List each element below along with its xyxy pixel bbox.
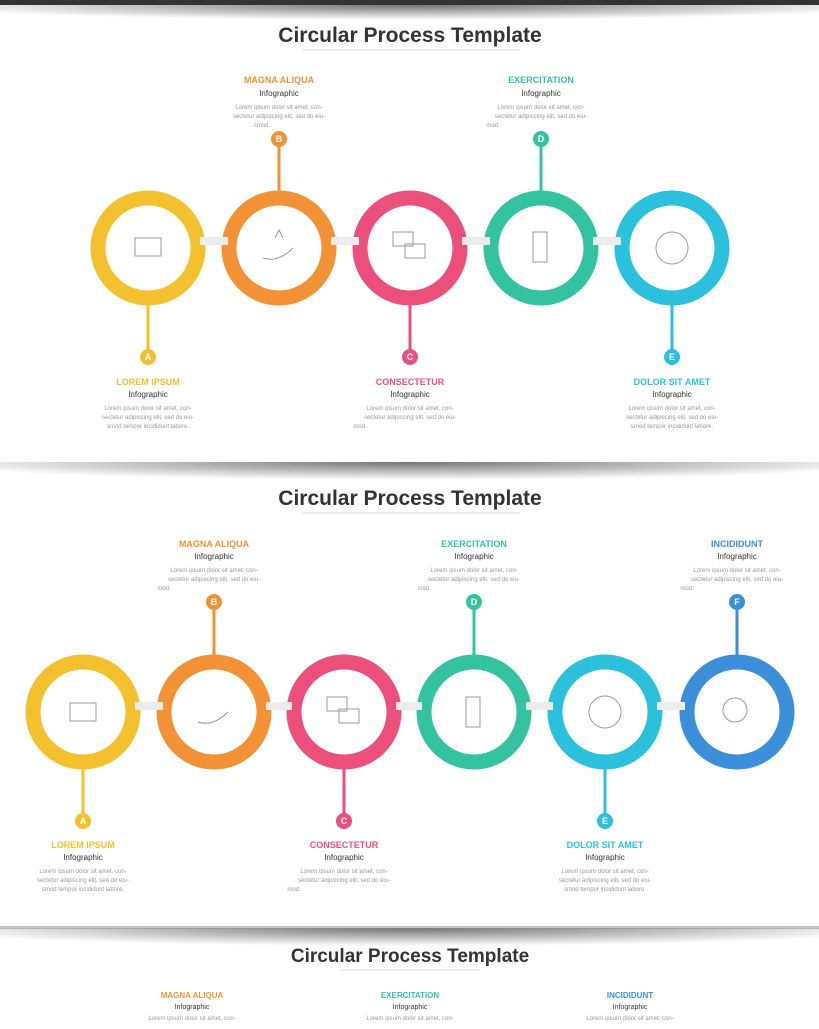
- text blocks 2: sectetur adipiscing elit, sed do eiu-: [559, 878, 651, 884]
- process chain 2: F: [734, 597, 740, 607]
- text blocks 1: EXERCITATION: [508, 75, 574, 85]
- text blocks 1: mod.: [486, 123, 500, 129]
- text blocks 2: sectetur adipiscing elit, sed do eiu-: [168, 577, 260, 583]
- text blocks 3: Infographic: [175, 1004, 210, 1011]
- text blocks 1: smod.: [254, 123, 270, 129]
- text blocks 2: DOLOR SIT AMET: [567, 840, 644, 850]
- text blocks 3: Lorem ipsum dolor sit amet, con-: [586, 1016, 674, 1022]
- text blocks 2: Infographic: [585, 853, 625, 862]
- text blocks 2: sectetur adipiscing elit, sed do eiu-: [37, 878, 129, 884]
- text blocks 2: Infographic: [717, 552, 757, 561]
- text blocks 2: Lorem ipsum dolor sit amet, con-: [430, 568, 518, 574]
- text blocks 1: Infographic: [390, 390, 430, 399]
- process chain 2: C: [341, 816, 348, 826]
- process chain 1: C: [407, 352, 414, 362]
- text blocks 2: LOREM IPSUM: [51, 840, 115, 850]
- text blocks 1: Lorem ipsum dolor sit amet, con-: [104, 406, 192, 412]
- text blocks 2: sectetur adipiscing elit, sed do eiu-: [691, 577, 783, 583]
- text blocks 1: mod.: [353, 424, 367, 430]
- text blocks 3: [148, 991, 674, 1022]
- process chain 2: B: [211, 597, 218, 607]
- text blocks 1: Lorem ipsum dolor sit amet, con-: [628, 406, 716, 412]
- text blocks 1: DOLOR SIT AMET: [634, 377, 711, 387]
- text blocks 1: CONSECTETUR: [376, 377, 445, 387]
- text blocks 2: Lorem ipsum dolor sit amet, con-: [300, 869, 388, 875]
- text blocks 2: INCIDIDUNT: [711, 539, 763, 549]
- text blocks 2: Infographic: [194, 552, 234, 561]
- text blocks 1: MAGNA ALIQUA: [244, 75, 315, 85]
- text blocks 1: Infographic: [652, 390, 692, 399]
- process chain 2: D: [471, 597, 478, 607]
- text blocks 1: smod tempor incididunt labore.: [631, 424, 713, 430]
- text blocks 2: [37, 539, 783, 893]
- text blocks 2: mod.: [157, 586, 171, 592]
- process chain 1: D: [538, 134, 545, 144]
- text blocks 2: smod tempor incididunt labore.: [564, 887, 646, 893]
- text blocks 1: sectetur adipiscing elit, sed do eiu-: [233, 114, 325, 120]
- text blocks 3: Infographic: [613, 1004, 648, 1011]
- text blocks 2: Lorem ipsum dolor sit amet, con-: [170, 568, 258, 574]
- text blocks 1: sectetur adipiscing elit, sed do eiu-: [102, 415, 194, 421]
- text blocks 1: sectetur adipiscing elit, sed do eiu-: [495, 114, 587, 120]
- text blocks 1: Infographic: [128, 390, 168, 399]
- title 3: Circular Process Template: [291, 946, 529, 967]
- text blocks 3: INCIDIDUNT: [607, 991, 653, 1000]
- process chain 1: [98, 131, 722, 365]
- text blocks 2: Lorem ipsum dolor sit amet, con-: [561, 869, 649, 875]
- text blocks 2: sectetur adipiscing elit, sed do eiu-: [298, 878, 390, 884]
- text blocks 2: mod.: [287, 887, 301, 893]
- text blocks 2: Lorem ipsum dolor sit amet, con-: [693, 568, 781, 574]
- title 2: Circular Process Template: [278, 487, 542, 510]
- process chain 2: [33, 594, 787, 829]
- text blocks 2: smod tempor incididunt labore.: [42, 887, 124, 893]
- text blocks 2: Infographic: [324, 853, 364, 862]
- text blocks 1: smod tempor incididunt labore.: [107, 424, 189, 430]
- text blocks 3: Infographic: [393, 1004, 428, 1011]
- text blocks 1: Lorem ipsum dolor sit amet, con-: [497, 105, 585, 111]
- text blocks 1: Infographic: [259, 89, 299, 98]
- text blocks 2: Infographic: [63, 853, 103, 862]
- text blocks 3: Lorem ipsum dolor sit amet, con-: [148, 1016, 236, 1022]
- text blocks 1: Lorem ipsum dolor sit amet, con-: [366, 406, 454, 412]
- process chain 2: A: [80, 816, 87, 826]
- text blocks 2: EXERCITATION: [441, 539, 507, 549]
- text blocks 1: Infographic: [521, 89, 561, 98]
- text blocks 3: Lorem ipsum dolor sit amet, con-: [366, 1016, 454, 1022]
- text blocks 2: CONSECTETUR: [310, 840, 379, 850]
- text blocks 3: EXERCITATION: [381, 991, 439, 1000]
- text blocks 1: sectetur adipiscing elit, sed do eiu-: [626, 415, 718, 421]
- text blocks 2: Infographic: [454, 552, 494, 561]
- text blocks 1: LOREM IPSUM: [116, 377, 180, 387]
- text blocks 1: Lorem ipsum dolor sit amet, con-: [235, 105, 323, 111]
- title 1: Circular Process Template: [278, 24, 542, 47]
- text blocks 1: [102, 75, 718, 430]
- text blocks 2: Lorem ipsum dolor sit amet, con-: [39, 869, 127, 875]
- text blocks 1: sectetur adipiscing elit, sed do eiu-: [364, 415, 456, 421]
- text blocks 3: MAGNA ALIQUA: [161, 991, 223, 1000]
- text blocks 2: mod.: [680, 586, 694, 592]
- process chain 1: E: [669, 352, 675, 362]
- text blocks 2: mod.: [417, 586, 431, 592]
- text blocks 2: MAGNA ALIQUA: [179, 539, 250, 549]
- process chain 2: E: [602, 816, 608, 826]
- process chain 1: A: [145, 352, 152, 362]
- text blocks 2: sectetur adipiscing elit, sed do eiu-: [428, 577, 520, 583]
- process chain 1: B: [276, 134, 283, 144]
